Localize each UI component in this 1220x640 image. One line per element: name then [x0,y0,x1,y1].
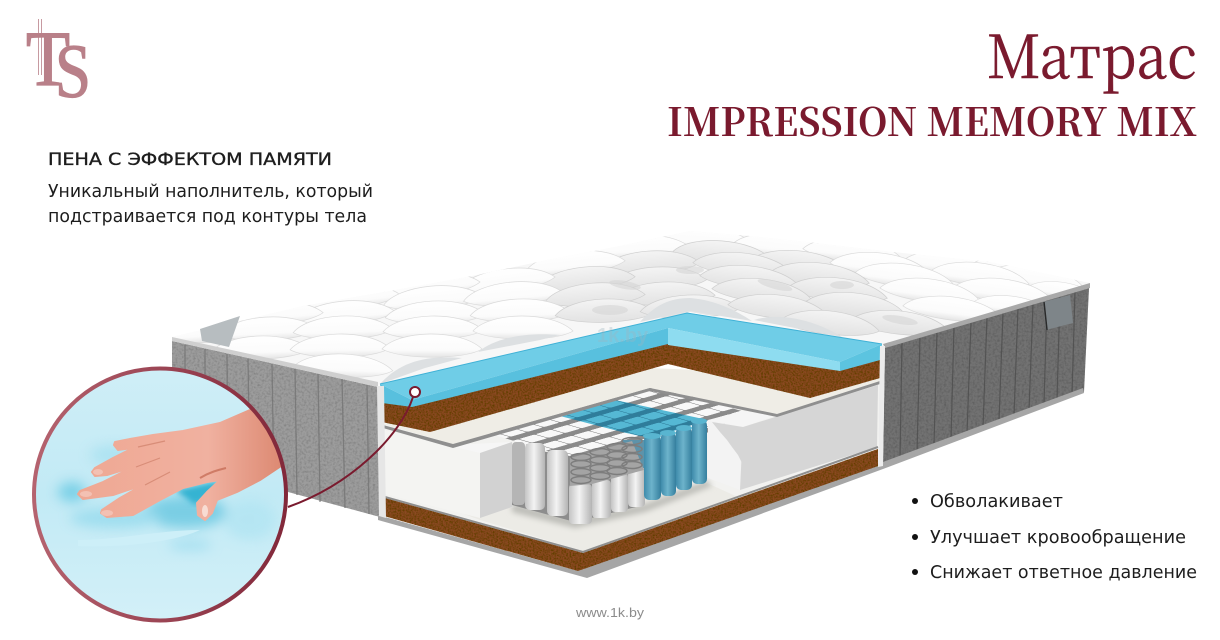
floor sheet [440,483,740,551]
feature description [48,181,373,227]
spring block shadow [512,440,644,522]
piping [172,337,378,387]
faint watermark: 1k.by [597,325,649,347]
side label tag [1043,295,1073,330]
thin top sheet [383,368,880,444]
base piping strip [378,388,1084,578]
inset circle: hand pressing memory foam [34,368,295,620]
left side panel [172,316,380,517]
quilted top surface [183,235,1082,384]
connector from foam layer to inset circle [288,387,420,507]
memory foam layer [380,313,882,407]
logo: TS monogram: T [26,15,70,102]
pocket spring coils: white row [512,442,645,524]
benefits list: Обволакивает [930,491,1063,512]
benefits list [912,491,1197,583]
interior backing [383,372,880,556]
logo: TS monogram [26,15,91,114]
cut edges of the cover [377,386,386,518]
feature heading: ПЕНА С ЭФФЕКТОМ ПАМЯТИ [48,150,332,170]
side label tag [200,316,240,347]
benefits list: Снижает ответное давление [930,562,1197,583]
feature description: подстраивается под контуры тела [48,206,367,227]
source url: www.1k.by [575,605,645,620]
right foam block [708,385,878,490]
cutaway section [377,313,885,571]
upper coir layer [382,342,880,432]
benefits list: Улучшает кровообращение [930,527,1186,548]
title: Матрас: Матрас [987,10,1197,96]
logo: TS monogram: S [55,30,91,114]
exposed cavities under quilting [380,298,842,384]
foliage stitching [592,266,918,327]
pocket spring coils: blue row [643,418,707,500]
hand [77,409,281,521]
feature description: Уникальный наполнитель, который [48,181,373,202]
left foam block [384,428,512,518]
mattress illustration [164,224,1098,578]
floor edge [385,447,878,552]
subtitle: product name: IMPRESSION MEMORY MIX [667,92,1197,148]
right side panel [883,283,1090,464]
foam imprint shading [58,445,276,551]
pocket spring tops: white [488,384,745,470]
piping [883,283,1090,348]
exposed steel springs [570,438,644,486]
feature text block [48,150,373,227]
pocket spring tops: blue [560,400,708,437]
circle ring [34,368,286,620]
lower coir layer [384,449,878,571]
